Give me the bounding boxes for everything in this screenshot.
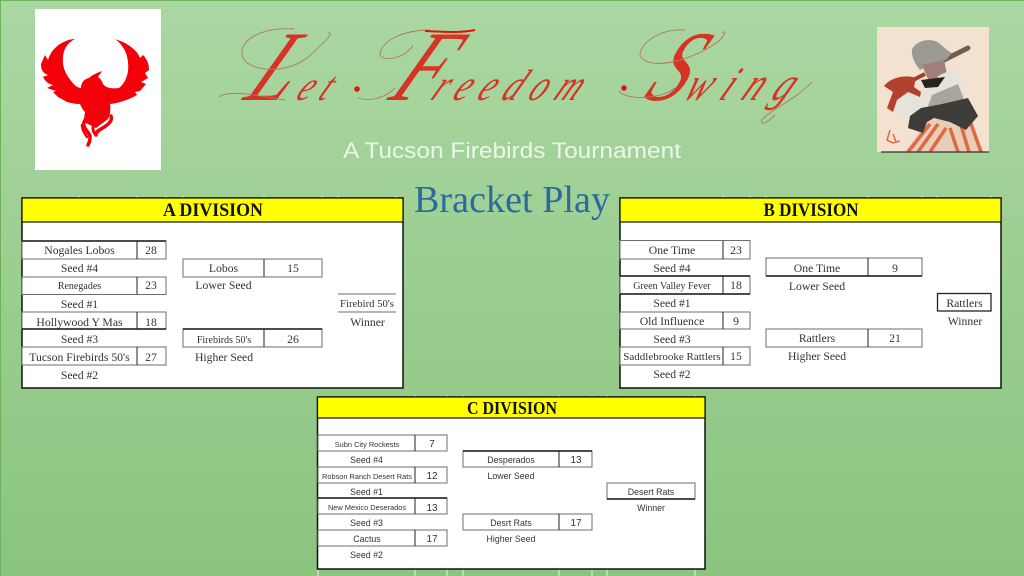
division header: A DIVISION <box>163 200 263 221</box>
semifinal matchups: Seed #3 <box>350 518 383 528</box>
winner <box>338 294 396 329</box>
semifinal matchups: Seed #2 <box>61 369 98 382</box>
semifinal matchups: Tucson Firebirds 50's <box>29 351 130 364</box>
panel: C division <box>318 395 705 576</box>
final matchups: Higher Seed <box>195 351 253 364</box>
final matchups: Lower Seed <box>488 471 535 481</box>
final matchups <box>766 258 922 363</box>
final matchups: Rattlers <box>799 332 836 345</box>
semifinal matchups: 7 <box>429 439 435 450</box>
winner: Winner <box>637 503 665 513</box>
semifinal matchups: Seed #4 <box>61 262 98 275</box>
final matchups <box>183 259 322 364</box>
subtitle: A Tucson Firebirds Tournament <box>343 138 682 163</box>
panel: A division <box>22 196 403 388</box>
semifinal matchups: 27 <box>145 351 157 364</box>
semifinal matchups: Renegades <box>58 281 101 292</box>
semifinal matchups: 12 <box>426 471 438 482</box>
final matchups: 15 <box>287 262 299 275</box>
semifinal matchups: Seed #4 <box>350 455 383 465</box>
title: Let Freedom Swing <box>219 12 850 123</box>
semifinal matchups: Seed #2 <box>653 368 691 381</box>
semifinal matchups: Seed #3 <box>653 333 691 346</box>
semifinal matchups: New Mexico Deserados <box>328 503 406 512</box>
final matchups <box>463 451 592 544</box>
semifinal matchups: 15 <box>730 350 742 363</box>
semifinal matchups: Seed #1 <box>61 298 98 311</box>
final matchups: Lobos <box>209 262 239 275</box>
semifinal matchups: Seed #4 <box>653 262 691 275</box>
semifinal matchups: 28 <box>145 244 157 257</box>
final matchups: Lower Seed <box>789 280 845 293</box>
title: Let Freedom Swing: S <box>628 12 730 123</box>
semifinal matchups: Saddlebrooke Rattlers <box>623 351 721 363</box>
division header: B DIVISION <box>764 200 859 221</box>
semifinal matchups: Nogales Lobos <box>44 244 115 257</box>
title: Let Freedom Swing: L <box>227 12 334 123</box>
semifinal matchups: Seed #1 <box>350 487 383 497</box>
winner: Winner <box>948 315 982 328</box>
semifinal matchups: Subn City Rockests <box>335 440 400 449</box>
semifinal matchups: Seed #1 <box>653 297 691 310</box>
division header <box>22 198 403 222</box>
semifinal matchups: Green Valley Fever <box>633 281 711 292</box>
semifinal matchups: Hollywood Y Mas <box>36 316 123 329</box>
semifinal matchups: Cactus <box>353 534 381 544</box>
final matchups: 13 <box>570 455 582 466</box>
semifinal matchups: 13 <box>426 503 438 514</box>
heading: Bracket Play: Bracket Play <box>414 179 610 221</box>
final matchups: Lower Seed <box>195 279 252 292</box>
semifinal matchups: One Time <box>649 244 695 257</box>
semifinal matchups <box>620 240 750 381</box>
final matchups: Higher Seed <box>487 534 536 544</box>
title: Let Freedom Swing: et <box>289 63 371 109</box>
final matchups: Firebirds 50's <box>197 335 251 346</box>
final matchups: 17 <box>570 518 582 529</box>
semifinal matchups: 23 <box>730 244 742 257</box>
final matchups: One Time <box>794 262 840 275</box>
semifinal matchups: 23 <box>145 279 157 292</box>
illustration: Uncle Sam swinging a bat <box>877 27 989 152</box>
final matchups: Desperados <box>487 455 535 465</box>
semifinal matchups: 9 <box>733 315 739 328</box>
semifinal matchups: 18 <box>145 316 157 329</box>
semifinal matchups: Seed #2 <box>350 550 383 560</box>
winner: Rattlers <box>946 297 983 310</box>
title: Let Freedom Swing: reedom <box>423 62 625 110</box>
semifinal matchups: Old Influence <box>640 315 704 328</box>
final matchups: Higher Seed <box>788 350 846 363</box>
division header <box>620 198 1001 222</box>
final matchups: 26 <box>287 333 299 346</box>
final matchups: Desrt Rats <box>490 518 532 528</box>
semifinal matchups <box>22 241 166 382</box>
semifinal matchups: Seed #3 <box>61 333 98 346</box>
semifinal matchups <box>318 435 447 560</box>
winner <box>607 483 695 513</box>
title: Let Freedom Swing: wing <box>674 58 823 111</box>
winner: Firebird 50's <box>340 298 394 310</box>
panel: B division <box>620 196 1001 388</box>
final matchups: 21 <box>889 332 901 345</box>
semifinal matchups: 17 <box>426 534 438 545</box>
semifinal matchups: Robson Ranch Desert Rats <box>322 472 412 481</box>
logo: red phoenix on white card <box>35 9 161 170</box>
final matchups: 9 <box>892 262 898 275</box>
division header <box>318 397 705 418</box>
winner: Desert Rats <box>628 487 675 497</box>
winner: Winner <box>350 316 385 329</box>
winner <box>938 294 991 328</box>
title: Let Freedom Swing: F <box>372 12 484 123</box>
division header: C DIVISION <box>467 398 557 418</box>
semifinal matchups: 18 <box>730 279 742 292</box>
